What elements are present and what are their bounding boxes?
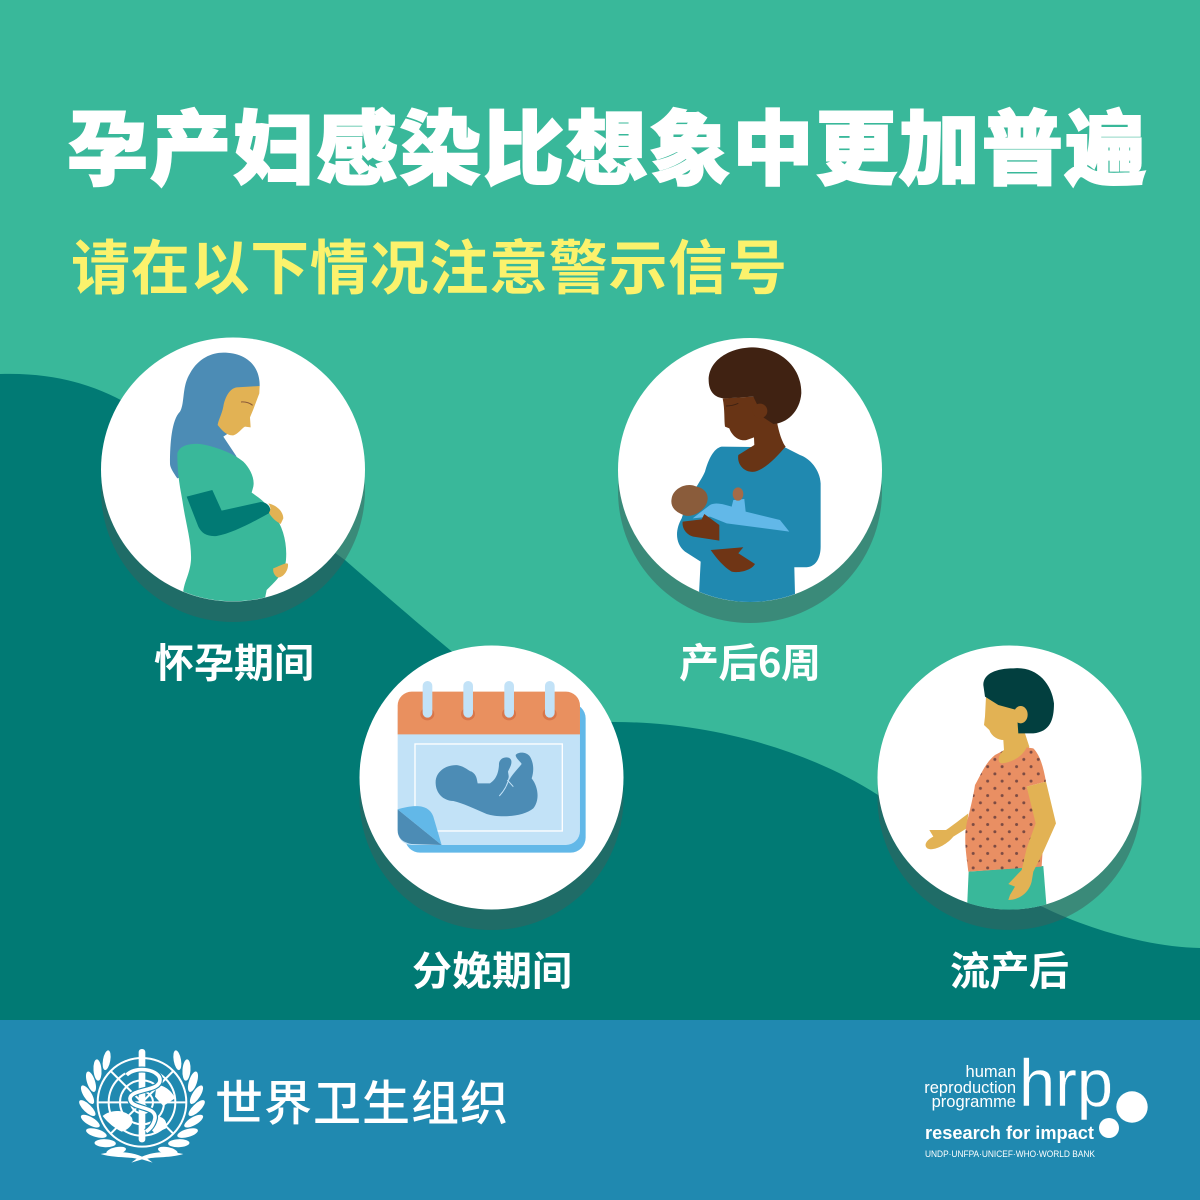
icon: WHO emblem: [77, 1049, 207, 1163]
label: after miscarriage: 流产后: [950, 939, 1069, 997]
sponsors: UNDP·UNFPA·UNICEF·WHO·WORLD BANK: [925, 1149, 1095, 1159]
icon: pregnant woman: [170, 353, 288, 607]
hrp programme name: reproduction: [924, 1079, 1016, 1097]
panel: during childbirth: [360, 646, 624, 930]
label: during childbirth: 分娩期间: [412, 939, 572, 997]
dark wave background: [0, 374, 1200, 1030]
panel: six weeks after childbirth: [618, 338, 882, 623]
panel: during pregnancy: [101, 338, 365, 622]
label: six weeks postpartum: 产后6周: [679, 631, 821, 689]
label: during pregnancy: 怀孕期间: [154, 631, 314, 689]
hrp dots: [1099, 1091, 1148, 1138]
footer bar: [0, 1020, 1200, 1200]
circle shadow: [878, 666, 1142, 930]
hrp programme name: human: [966, 1063, 1016, 1081]
logo: hrp: [924, 1046, 1148, 1159]
panel: after miscarriage: [878, 646, 1142, 930]
white circle: [618, 338, 882, 602]
laurel leaves right: [157, 1050, 207, 1157]
WHO name: 世界卫生组织: [215, 1064, 508, 1134]
white circle: [360, 646, 624, 910]
title: 孕产妇感染比想象中更加普遍: [67, 85, 1146, 202]
hrp programme name: programme: [932, 1093, 1016, 1111]
tagline: research for impact: [925, 1123, 1094, 1143]
circle shadow: [618, 359, 882, 623]
circle shadow: [360, 666, 624, 930]
hrp letters: hrp: [1019, 1046, 1113, 1121]
circle shadow: [101, 358, 365, 622]
laurel leaves left: [77, 1050, 127, 1157]
white circle: [101, 338, 365, 602]
icon: calendar with baby: [398, 681, 586, 853]
subtitle: 请在以下情况注意警示信号: [71, 221, 787, 306]
hrp programme name: [924, 1063, 1016, 1111]
icon: mother holding baby: [671, 347, 821, 607]
white circle: [878, 646, 1142, 910]
icon: standing woman: [926, 668, 1056, 917]
